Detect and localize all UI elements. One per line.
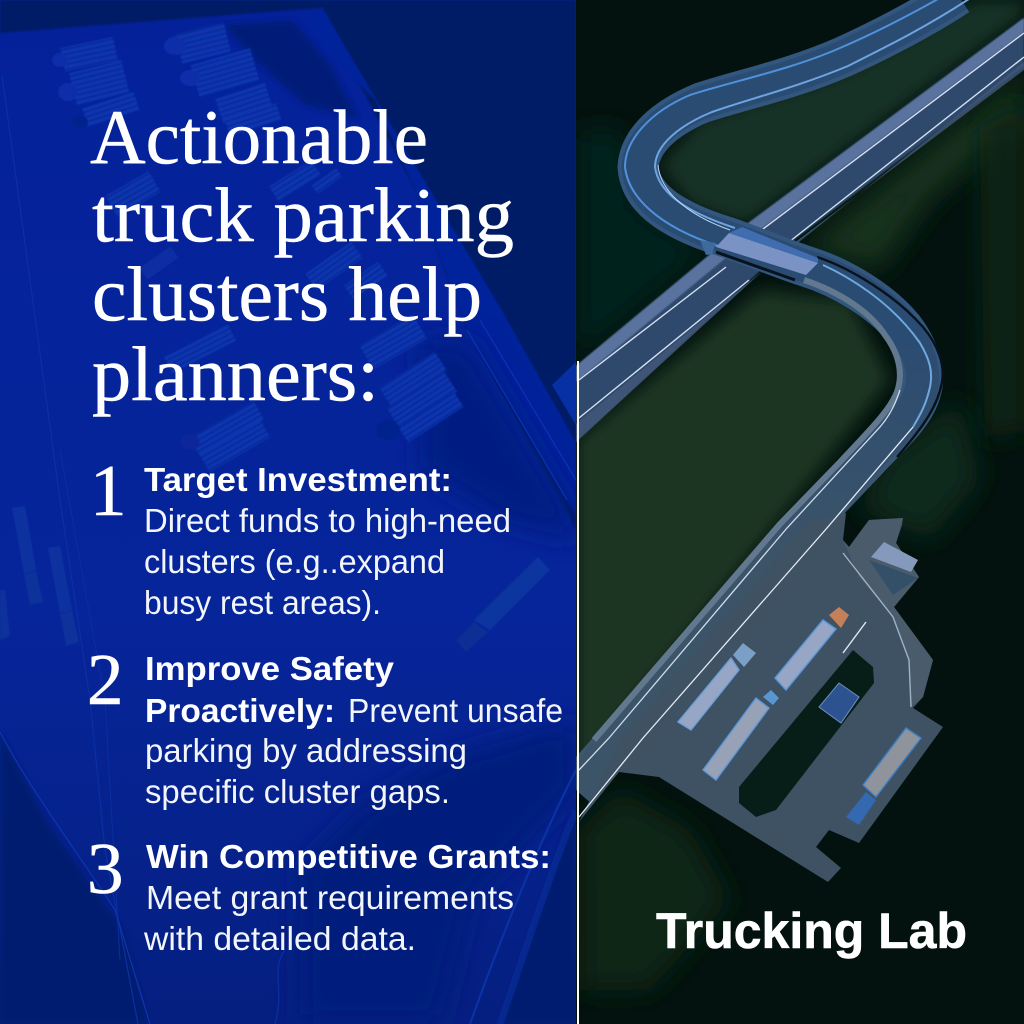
list item 2: improve safety: Proactively: — [145, 692, 335, 729]
brand label: Trucking Lab — [656, 903, 967, 959]
list item 2: improve safety: specific cluster gaps. — [145, 773, 450, 810]
list item 2: improve safety: Improve Safety — [145, 650, 395, 687]
list item 1: target investment — [90, 450, 511, 621]
truck three — [703, 690, 779, 780]
list item 1: target investment: Target Investment: — [144, 461, 452, 498]
title: clusters help — [92, 251, 482, 337]
truck four — [846, 728, 921, 825]
panel: left blue aerial background — [0, 0, 576, 1024]
list item 1: target investment: 1 — [90, 450, 126, 531]
list item 2: improve safety: 2 — [87, 639, 124, 720]
list item 1: target investment: Direct funds to high-need — [144, 502, 511, 539]
divider line — [577, 361, 579, 1024]
straight highway — [576, 18, 1024, 442]
truck with orange cab — [775, 607, 849, 690]
truck clusters, lower — [180, 352, 464, 472]
list item 1: target investment: clusters (e.g..expand — [144, 543, 445, 580]
truck near building — [869, 542, 918, 595]
list item 2: improve safety — [87, 639, 563, 810]
parked trucks, lower left — [0, 506, 550, 652]
list item 2: improve safety: parking by addressing — [145, 732, 467, 769]
list item 3: win competitive grants: Meet grant requirements — [146, 879, 514, 916]
bridge deck — [716, 233, 818, 275]
title: truck parking — [92, 172, 514, 258]
list item 3: win competitive grants: Win Competitive Grants: — [146, 838, 551, 875]
truck one — [678, 643, 756, 730]
list item 3: win competitive grants: with detailed data. — [143, 920, 416, 957]
title: planners: — [92, 331, 379, 417]
list item 3: win competitive grants: 3 — [87, 828, 124, 909]
blue box vehicle — [819, 683, 859, 723]
title — [90, 94, 514, 417]
truck clusters, middle — [105, 160, 427, 373]
title: Actionable — [90, 94, 428, 180]
truck clusters, upper left — [52, 22, 282, 137]
list item 2: improve safety: Prevent unsafe — [348, 692, 563, 729]
panel: right aerial photo — [575, 0, 1024, 1024]
list item 3: win competitive grants — [87, 828, 551, 957]
parking lot surface — [579, 390, 943, 882]
list item 1: target investment: busy rest areas). — [144, 584, 381, 621]
winding road and bridge — [575, 0, 975, 789]
